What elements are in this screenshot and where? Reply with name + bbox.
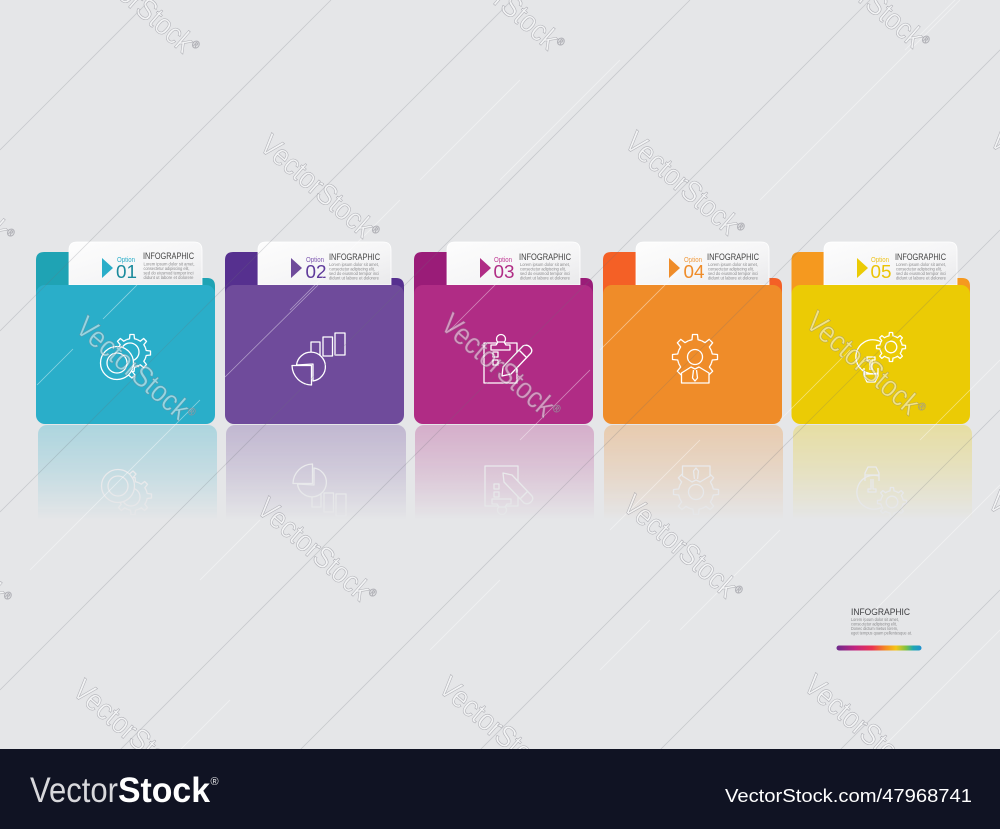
reflections of the folders <box>38 425 972 510</box>
watermarks: VectorStock <box>432 670 575 800</box>
panel: folder option 02: 02 <box>306 261 326 282</box>
watermarks: VectorStock <box>616 488 759 618</box>
panel: folder option 02 <box>225 242 404 424</box>
legend: infographic note with rainbow bar: INFOGRAPHIC <box>851 607 910 617</box>
panel: folder option 03: Option <box>494 255 512 264</box>
panel: folder option 04: consectetur adipiscing elit, <box>708 266 754 272</box>
watermarks: VectorStock <box>618 125 761 255</box>
panel: folder option 04: didunt ut labore et dolorere <box>708 276 759 280</box>
panel: folder option 03: INFOGRAPHIC <box>519 252 571 263</box>
watermarks: ® <box>554 35 567 49</box>
panel: folder option 05: didunt ut labore et dolorere <box>896 276 947 280</box>
panel: folder option 03: 03 <box>494 261 514 282</box>
footer bar: Stock <box>118 771 211 810</box>
footer bar: VectorStock.com/47968741 <box>725 786 972 806</box>
watermarks: ® <box>732 583 745 597</box>
panel: folder option 03: sed do eiusmod tempor inci <box>520 271 570 276</box>
watermarks: ® <box>734 220 747 234</box>
panel: folder option 05: INFOGRAPHIC <box>895 252 946 263</box>
panel: folder option 05: sed do eiusmod tempor inci <box>896 271 946 276</box>
panel: folder option 02: didunt ut labore et dolorere <box>329 276 380 280</box>
panel: folder option 01: 01 <box>116 261 137 282</box>
watermarks: ® <box>4 226 17 240</box>
watermarks: ® <box>366 586 379 600</box>
panel: folder option 05 <box>792 242 970 424</box>
watermarks: ® <box>915 400 928 414</box>
panel: folder option 05: Option <box>871 255 889 264</box>
legend: infographic note with rainbow bar: Donec dictum metus lorem, <box>851 626 898 631</box>
panel: folder option 01 <box>36 242 215 424</box>
panel: folder option 05: consectetur adipiscing elit, <box>896 266 942 272</box>
panel: folder option 02: consectetur adipiscing elit, <box>329 266 375 272</box>
panel: folder option 02: Option <box>306 255 324 264</box>
panel: folder option 02: Lorem ipsum dolor sit amet, <box>329 262 379 267</box>
footer bar <box>0 749 1000 829</box>
panel: folder option 01: sed do eiusmod tempor inci <box>144 270 194 276</box>
watermarks: VectorStock <box>66 673 209 803</box>
panel: folder option 03: didunt ut labore et dolorere <box>520 276 571 280</box>
watermarks: VectorStock <box>799 305 942 435</box>
watermarks: ® <box>369 223 382 237</box>
legend: infographic note with rainbow bar: eget tempus quam pellentesque at. <box>851 630 912 636</box>
panel: folder option 03 <box>414 242 593 424</box>
watermarks: VectorStock <box>253 128 396 258</box>
panel: folder option 03: Lorem ipsum dolor sit amet, <box>520 262 570 267</box>
footer bar: ® <box>210 776 219 788</box>
panel: folder option 04: sed do eiusmod tempor inci <box>708 271 758 276</box>
panel: folder option 04: Option <box>684 255 702 264</box>
panel: folder option 04: 04 <box>684 261 704 282</box>
panel: folder option 04: INFOGRAPHIC <box>707 252 759 263</box>
watermarks: ® <box>919 33 932 47</box>
watermarks: VectorStock <box>69 310 212 440</box>
panel: folder option 02: INFOGRAPHIC <box>329 252 380 263</box>
watermarks: ® <box>189 38 202 52</box>
panel: folder option 01: consectetur adipiscing elit, <box>144 266 190 271</box>
watermarks: ® <box>185 405 198 419</box>
watermarks: ® <box>550 402 563 416</box>
panel: folder option 01: Lorem ipsum dolor sit amet, <box>144 262 194 266</box>
panel: folder option 01: Option <box>117 255 135 264</box>
legend: infographic note with rainbow bar: Lorem ipsum dolor sit amet, <box>851 617 899 622</box>
watermarks: ® <box>913 763 926 777</box>
panel: folder option 05: Lorem ipsum dolor sit amet, <box>896 262 946 267</box>
watermarks: ® <box>1 589 14 603</box>
panel: folder option 03: consectetur adipiscing elit, <box>520 266 566 272</box>
watermarks: VectorStock <box>797 668 940 798</box>
watermarks: VectorStock <box>434 307 577 437</box>
panel: folder option 01: INFOGRAPHIC <box>143 251 194 262</box>
legend: infographic note with rainbow bar: consectetur adipiscing elit, <box>851 622 897 626</box>
watermarks: VectorStock <box>250 491 393 621</box>
watermarks: ® <box>182 768 195 782</box>
watermarks: ® <box>548 765 561 779</box>
panel: folder option 02: sed do eiusmod tempor inci <box>329 271 379 276</box>
panel: folder option 05: 05 <box>870 261 892 282</box>
panel: folder option 04 <box>603 242 782 424</box>
legend: infographic note with rainbow bar <box>836 607 922 650</box>
footer bar: Vector <box>30 771 118 810</box>
panel: folder option 01: didunt ut labore et dolorere <box>144 275 194 280</box>
panel: folder option 04: Lorem ipsum dolor sit amet, <box>708 262 758 267</box>
